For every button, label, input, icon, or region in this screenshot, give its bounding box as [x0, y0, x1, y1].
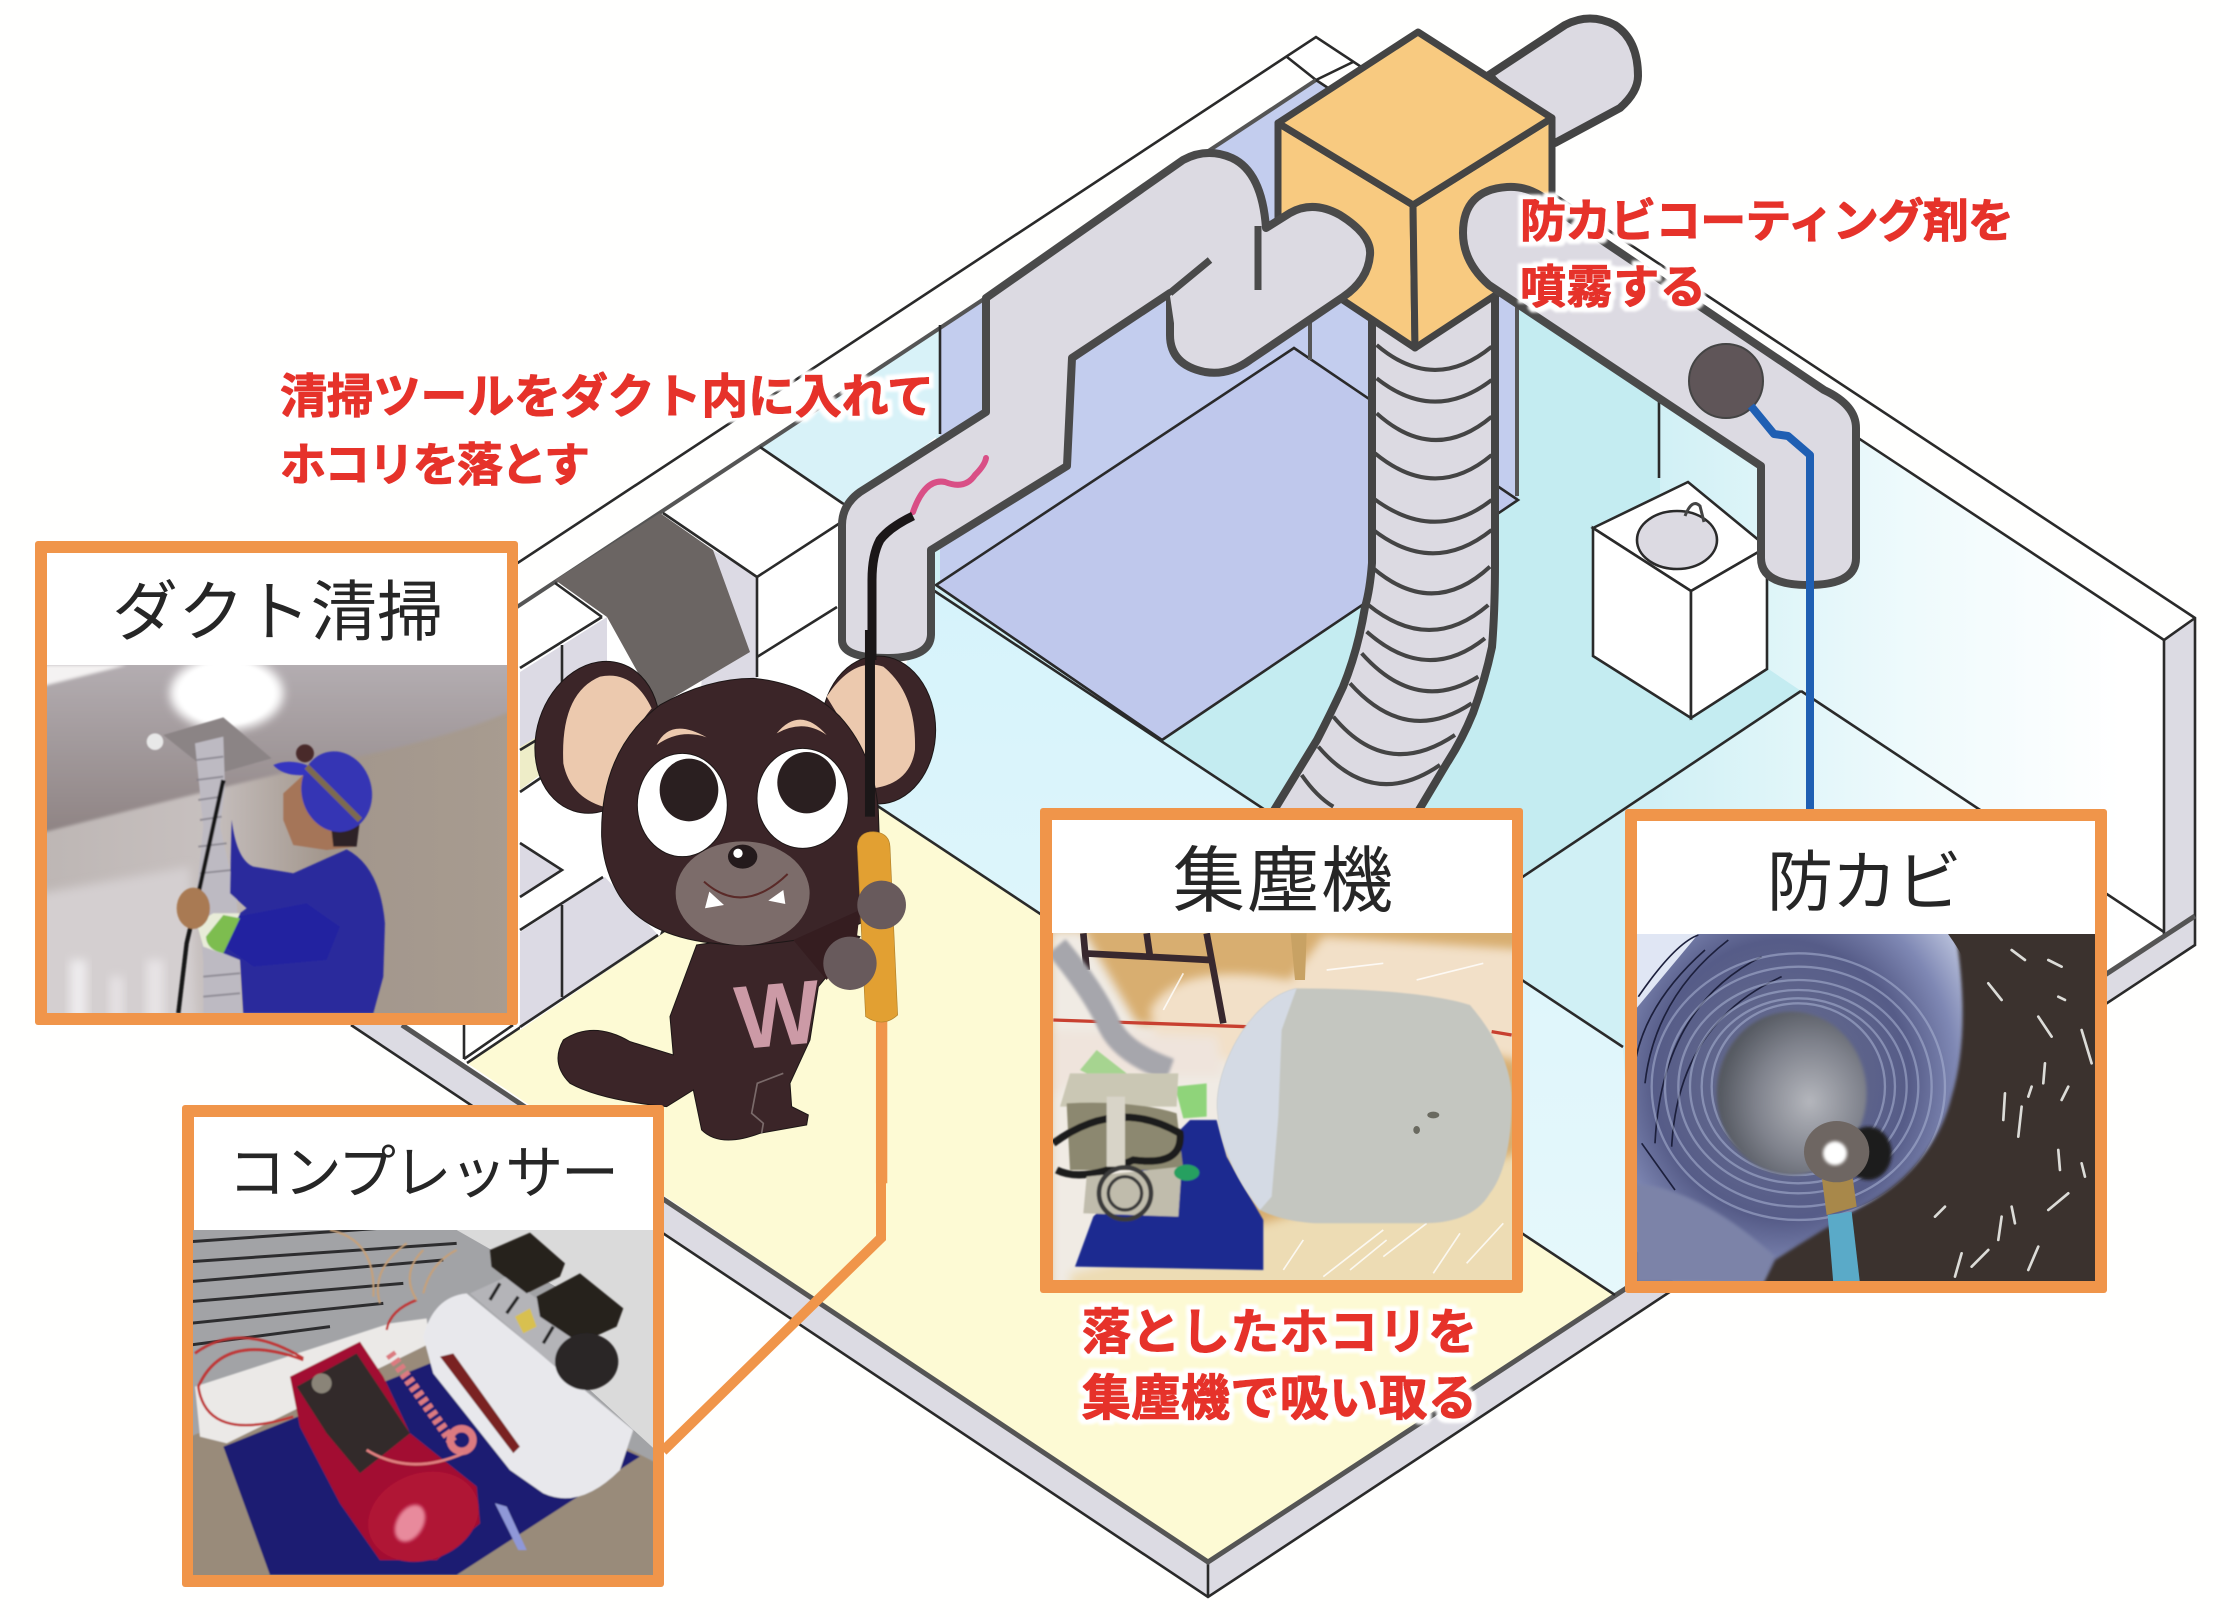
mascot arm and hands: [793, 881, 906, 990]
callout: cleaning tool instruction: ホコリを落とす: [280, 439, 590, 491]
heading: コンプレッサー: コンプレッサー: [228, 1141, 619, 1206]
panel: compressor photo: [182, 1105, 670, 1600]
panel: dust collector photo: [1040, 808, 1530, 1300]
mascot eyes: [637, 748, 848, 857]
flexible duct with ribs: [1265, 280, 1495, 825]
teal floor diamond: [1162, 500, 1801, 928]
heading: 集塵機: 集塵機: [1173, 842, 1393, 922]
callout: dust collection instruction: [1082, 1306, 1477, 1426]
mascot: bear character: [516, 630, 936, 1183]
callout: dust collection instruction: 落としたホコリを: [1082, 1306, 1477, 1360]
pale blue left wall: [760, 328, 940, 505]
orange guide line top: [876, 1017, 887, 1183]
photo: inflated dust collector bag: [1053, 933, 1512, 1280]
heading: 防カビ: 防カビ: [1767, 845, 1962, 919]
photo: compressors on blue mat: [193, 1230, 653, 1575]
callout: dust collection instruction: 集塵機で吸い取る: [1082, 1372, 1477, 1426]
heading: ダクト清掃: ダクト清掃: [112, 575, 443, 649]
mascot W letter: W: [731, 962, 825, 1069]
duct: top right branch behind cube: [1489, 18, 1638, 143]
panel: anti-mold photo: [1625, 809, 2107, 1293]
orange connector line to compressor: [663, 1150, 881, 1451]
right room floor and wall: [864, 80, 2164, 1295]
yellow floor: [467, 797, 1615, 1562]
mascot head: [602, 678, 882, 945]
panel: duct cleaning photo: [35, 541, 520, 1030]
callout: anti-mold spraying instruction: 防カビコーティング剤を: [1520, 195, 2014, 247]
duct: right run with spray nozzle: [1463, 187, 1856, 585]
blue spray hose: [1751, 406, 1810, 815]
photo: worker cleaning ceiling duct: [47, 665, 507, 1013]
photo: inside of flexible duct with spray nozzle: [1637, 934, 2095, 1281]
callout: anti-mold spraying instruction: 噴霧する: [1520, 261, 1706, 313]
mascot muzzle and mouth: [676, 841, 810, 945]
mascot eyebrows: [657, 720, 827, 745]
callout: cleaning tool instruction: 清掃ツールをダクト内に入れて: [280, 370, 934, 423]
cube: distribution chamber: [1278, 32, 1552, 348]
cable in mascot view: [865, 630, 875, 817]
mascot leg crease: [752, 1073, 783, 1133]
duct bend fold lines: [1170, 226, 1258, 330]
left room white walls: [464, 490, 860, 1059]
teal wall section: [1517, 212, 1660, 596]
duct: left run to room: [842, 153, 1370, 658]
callout: anti-mold spraying instruction: [1520, 195, 2014, 313]
dark duct box in left room: [555, 513, 750, 707]
mascot handle tool: [857, 832, 898, 1022]
pale blue floor left: [864, 590, 1640, 1310]
black cable: [872, 516, 913, 660]
washbasin cabinet: [1593, 482, 1767, 718]
callout: cleaning tool instruction: [280, 370, 934, 491]
mascot body and tail: [558, 927, 860, 1140]
mascot ears: [516, 645, 936, 830]
pink cleaning tool tip: [913, 458, 986, 512]
lavender room wall and floor: [940, 80, 1518, 740]
lavender floor diamond: [936, 348, 1518, 740]
spray nozzle circle: [1689, 344, 1763, 418]
